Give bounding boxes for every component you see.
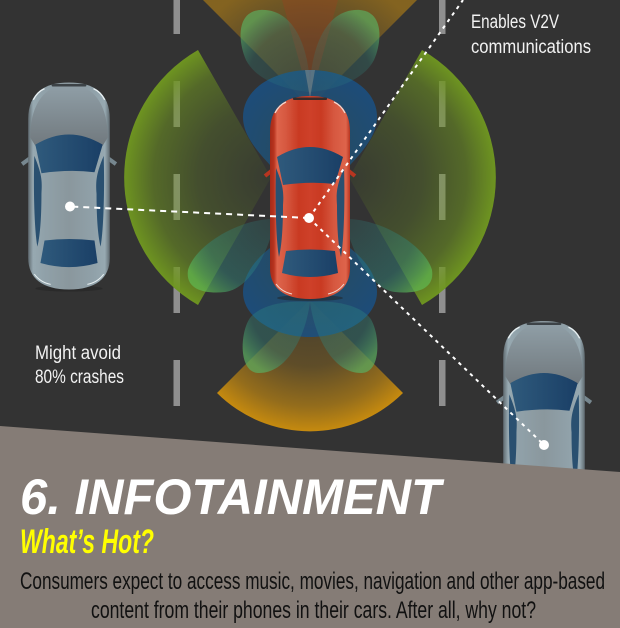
sensor lobes: rear left <box>243 302 310 373</box>
sensor lobes: side right <box>345 219 432 292</box>
callout: crashes: Might avoid <box>35 343 121 364</box>
link node: right car <box>539 440 549 450</box>
sensor field: left green wedge <box>124 50 271 305</box>
sensor field: front orange wedge <box>203 0 417 107</box>
bottom panel <box>0 426 620 628</box>
faint centre beam <box>305 70 315 98</box>
grey car left <box>22 82 116 292</box>
dotted link: to right car <box>309 218 544 445</box>
sensor lobes: front right <box>310 10 379 92</box>
dotted link: V2V upward <box>309 0 463 218</box>
grey car right <box>497 321 591 528</box>
right lane markings <box>439 0 446 406</box>
sensor field: rear orange wedge <box>217 300 403 431</box>
sensor field: right green wedge <box>349 50 496 305</box>
dotted link: to left car <box>70 206 309 218</box>
title: 6. INFOTAINMENT <box>20 469 445 525</box>
front red beam <box>282 0 338 100</box>
callout: V2V: communications <box>471 37 591 58</box>
sensor field: rear blue zone <box>243 248 377 337</box>
sensor lobes: rear right <box>310 302 377 373</box>
callout: V2V: Enables V2V <box>471 12 559 33</box>
sensor lobes: side left <box>188 219 275 292</box>
left lane markings <box>174 0 180 406</box>
callout: crashes: 80% crashes <box>35 367 124 388</box>
sensor lobes: front left <box>241 10 310 92</box>
red car <box>265 96 355 301</box>
link node: left car <box>65 202 75 212</box>
sensor field: front blue zone <box>243 70 377 165</box>
subheading: What’s Hot? <box>20 523 154 561</box>
link node: red car <box>304 213 314 223</box>
